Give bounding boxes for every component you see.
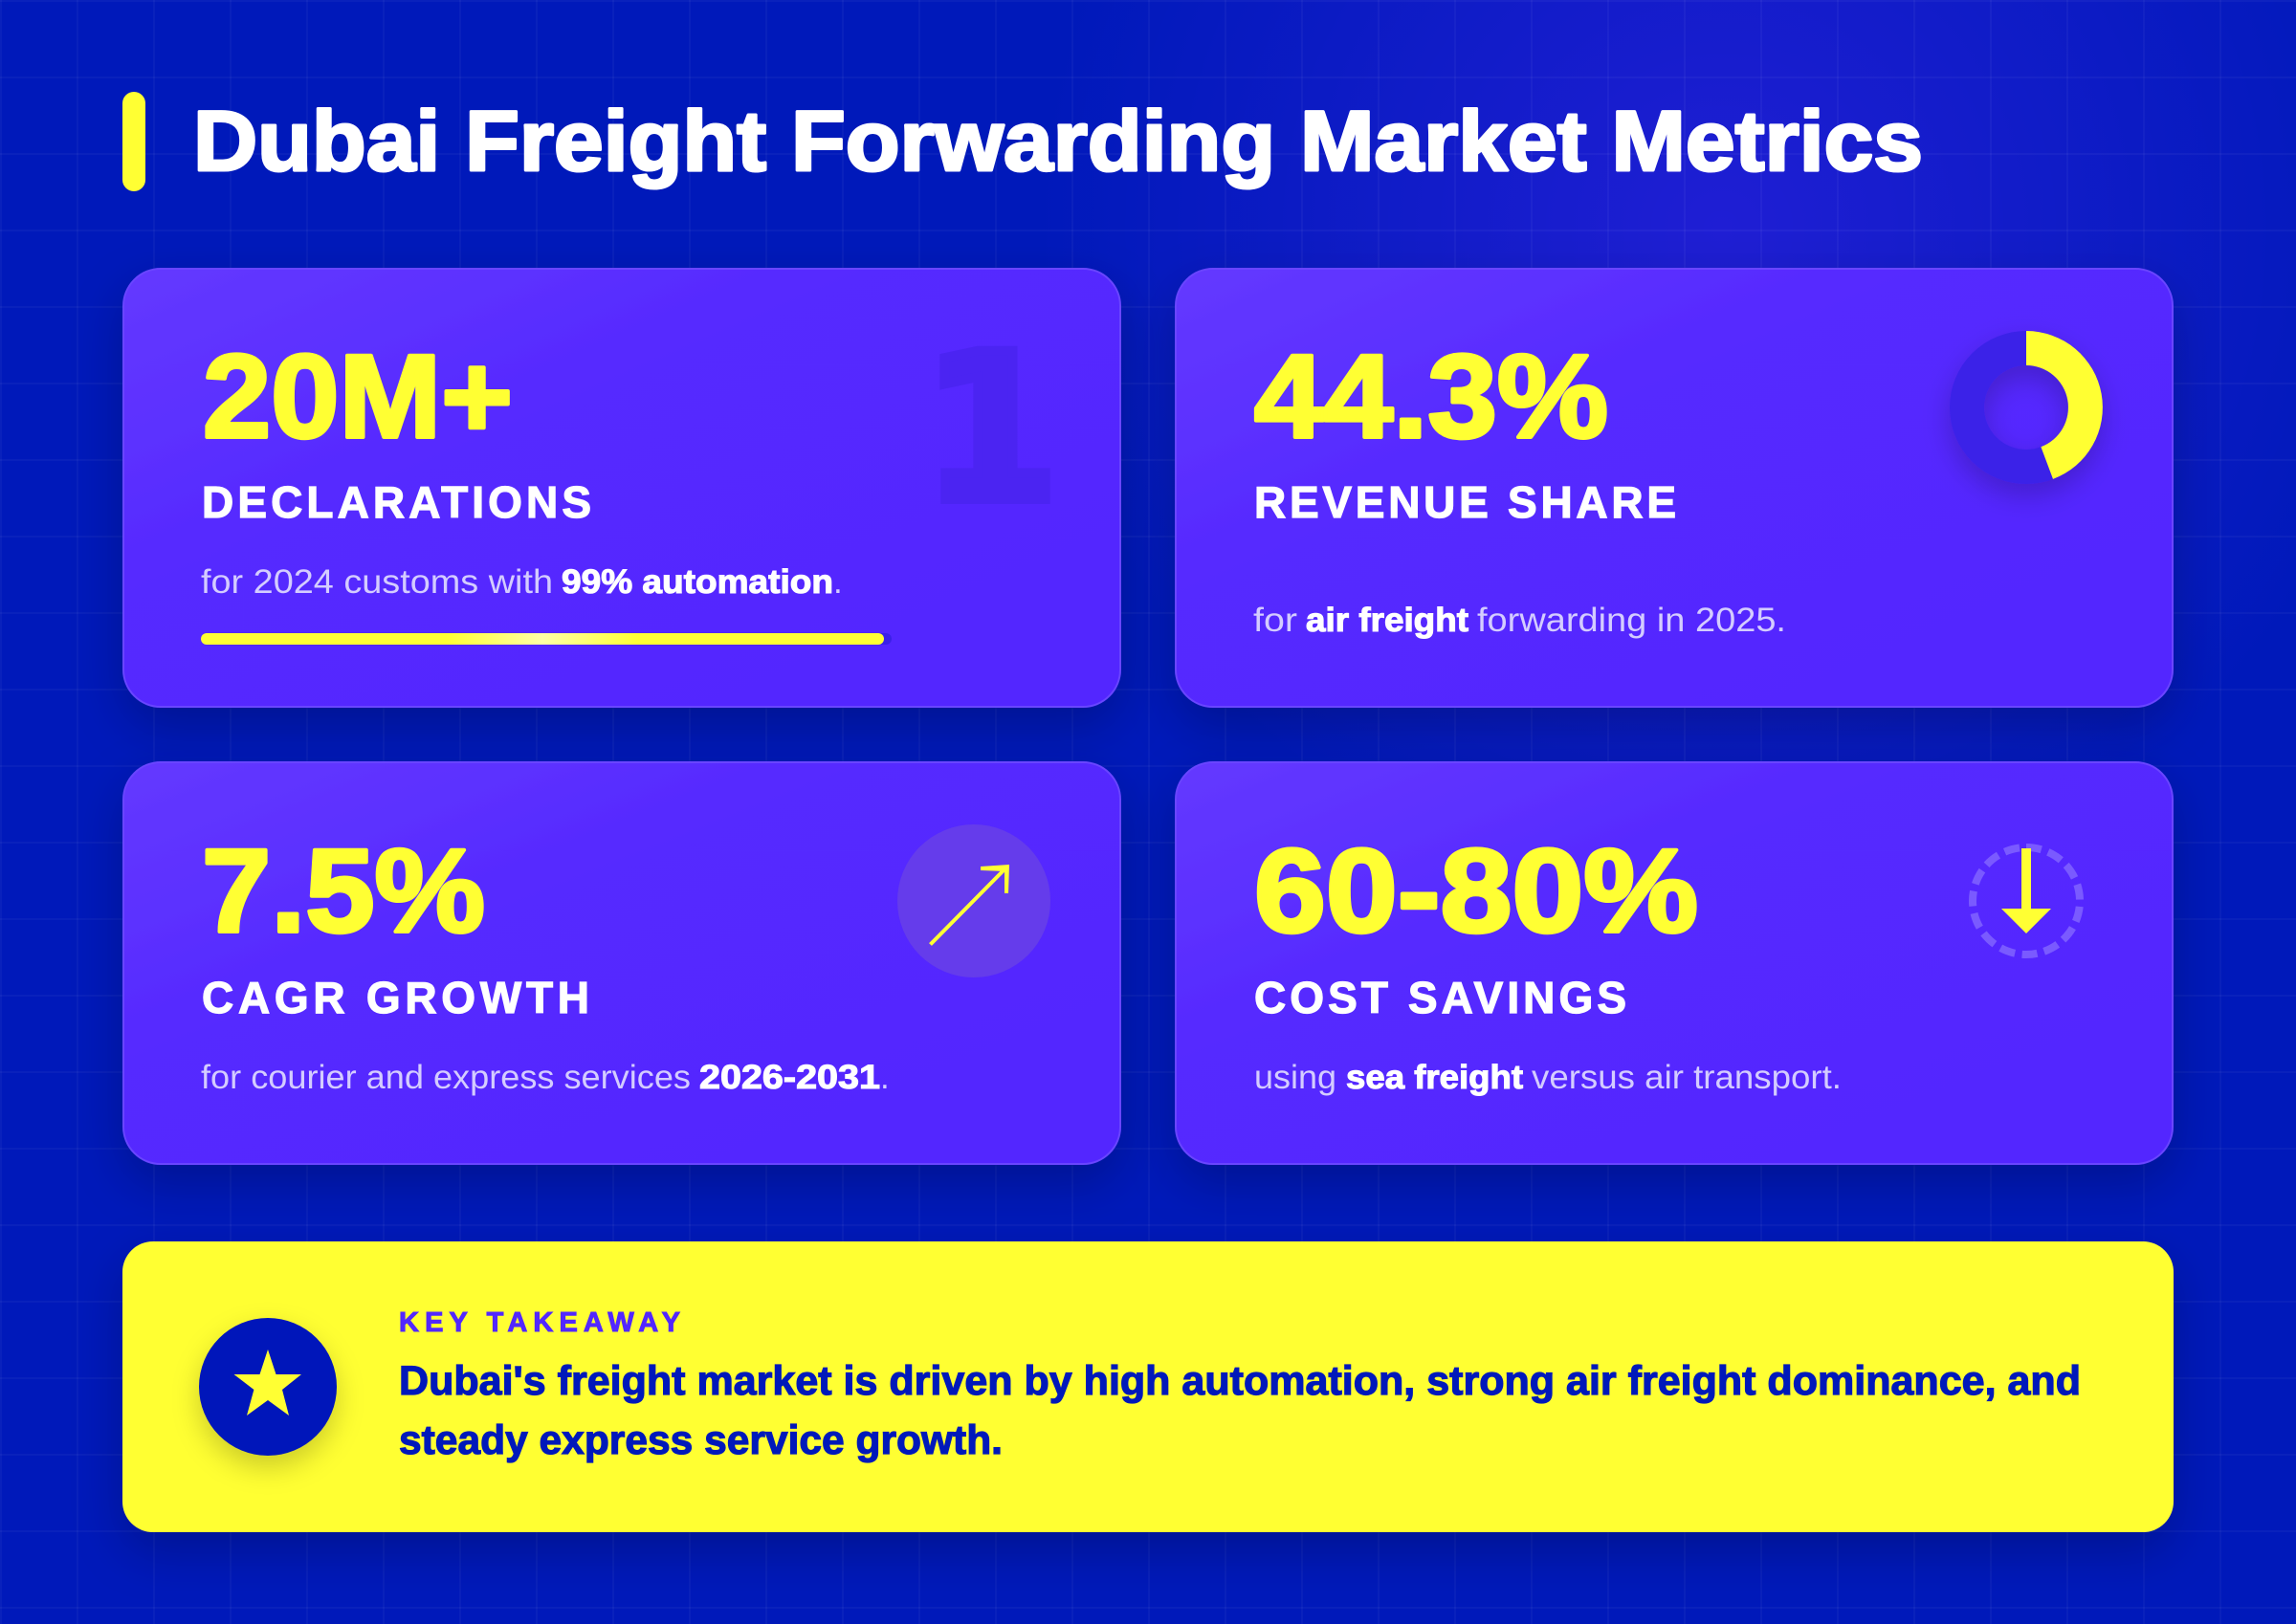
label: CAGR growth: CAGR GROWTH <box>202 973 589 1022</box>
progress bar <box>201 633 892 645</box>
panel: key takeaway <box>122 1241 2174 1532</box>
ghost number 1: 1 <box>922 311 1059 548</box>
label: cost savings: COST SAVINGS <box>1254 973 1626 1022</box>
description: 99% automation <box>562 563 833 601</box>
description: . <box>833 563 843 601</box>
title with accent bar: Dubai Freight Forwarding Market Metrics <box>193 93 1923 188</box>
panel: declarations <box>123 269 1120 707</box>
icon: star badge <box>199 1318 337 1456</box>
heading: key takeaway: KEY TAKEAWAY <box>399 1307 680 1338</box>
description <box>1253 602 1786 639</box>
label: revenue share: REVENUE SHARE <box>1254 477 1676 527</box>
description: sea freight <box>1346 1059 1523 1096</box>
takeaway text: steady express service growth. <box>399 1417 1003 1463</box>
description: using <box>1254 1059 1336 1096</box>
stat: 7.5%: 7.5% <box>202 825 485 957</box>
description: versus air transport. <box>1532 1059 1842 1096</box>
takeaway text <box>399 1358 2081 1463</box>
stat: 20M+: 20M+ <box>203 331 513 463</box>
panel: revenue share <box>1176 269 2173 707</box>
description <box>201 1059 890 1096</box>
panel: CAGR growth <box>123 762 1120 1164</box>
takeaway text: Dubai's freight market is driven by high automation, strong air freight dominance, and <box>399 1358 2081 1404</box>
donut chart <box>1967 331 2103 479</box>
description <box>201 563 843 601</box>
description: 2026-2031 <box>699 1059 880 1096</box>
icon: down arrow in dashed ring <box>1973 847 2080 955</box>
label: declarations: DECLARATIONS <box>202 477 591 527</box>
description: air freight <box>1306 602 1468 639</box>
stat: 44.3%: 44.3% <box>1254 331 1608 463</box>
description: for courier and express services <box>201 1059 691 1096</box>
description: . <box>880 1059 890 1096</box>
description <box>1254 1059 1842 1096</box>
description: for <box>1253 602 1297 639</box>
description: for 2024 customs with <box>201 563 553 601</box>
description: forwarding in 2025. <box>1477 602 1786 639</box>
stat: 60-80%: 60-80% <box>1254 825 1698 957</box>
icon: growth arrow <box>897 824 1050 977</box>
panel: cost savings <box>1176 762 2173 1164</box>
